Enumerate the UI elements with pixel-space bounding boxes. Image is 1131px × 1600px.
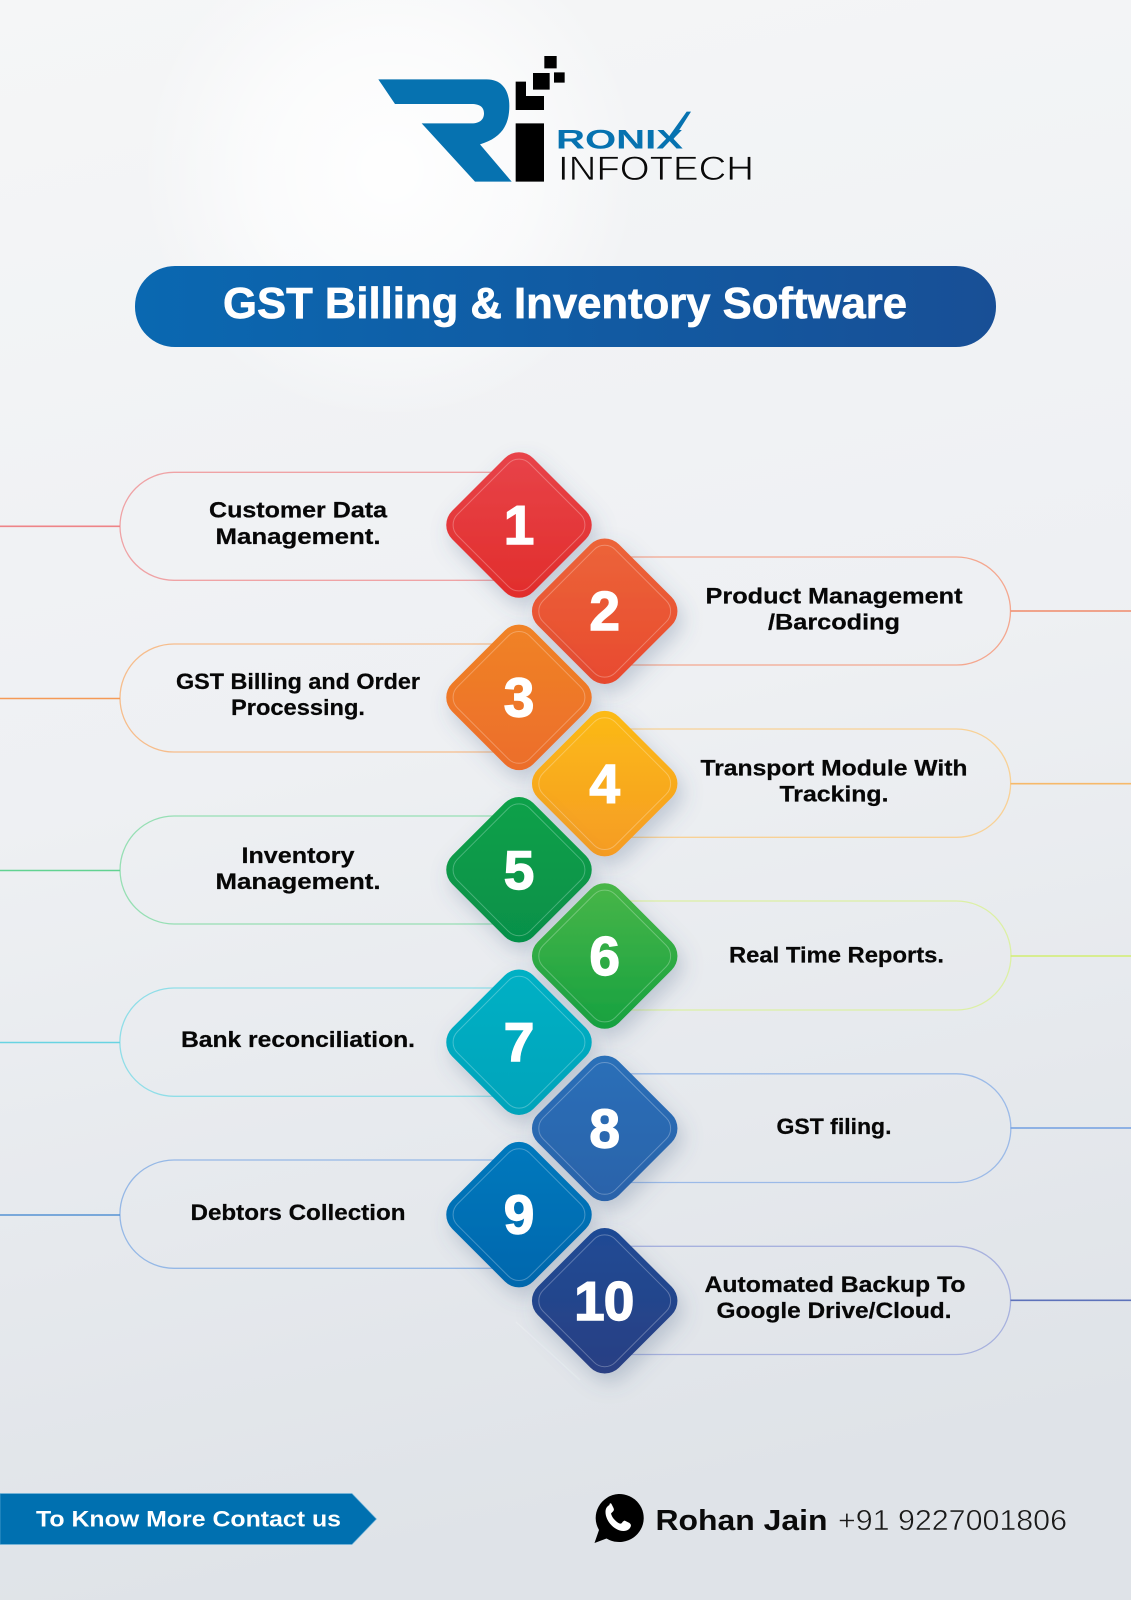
number diamond 7: 7 [504, 1011, 534, 1073]
number diamond 6: 6 [589, 925, 620, 987]
logo: Ronix Infotech [378, 56, 754, 188]
panel: item 5 outline [0, 816, 510, 924]
number diamond 9: 9 [504, 1184, 534, 1246]
contact ribbon [0, 1494, 376, 1544]
text: item 5: Management. [216, 869, 380, 894]
panel: item 3 outline [0, 644, 510, 752]
text: item 4 [700, 756, 968, 807]
number diamond 10: 10 [574, 1270, 633, 1332]
text: item 10: Automated Backup To [704, 1272, 966, 1297]
number diamond 1: 1 [504, 494, 534, 556]
number diamond 4: 4 [589, 753, 620, 815]
text: item 10 [704, 1272, 966, 1323]
panel: item 1 outline [0, 472, 510, 580]
text: item 1: Management. [216, 524, 380, 549]
text: item 4: Transport Module With [700, 756, 968, 781]
panel: item 7 outline [0, 988, 510, 1096]
text: item 7: Bank reconciliation. [181, 1027, 415, 1052]
faint decorative diamond edge [516, 1322, 580, 1380]
text: item 1 [209, 498, 388, 549]
panel: item 6 outline [600, 901, 1131, 1010]
number diamond 9 [438, 1134, 600, 1296]
number diamond 5 [438, 789, 600, 951]
text: item 2: /Barcoding [768, 610, 900, 634]
contact name: Rohan Jain [656, 1505, 828, 1537]
number diamond 8 [524, 1047, 686, 1209]
number diamond 2 [524, 530, 686, 692]
text: item 3: GST Billing and Order [176, 669, 420, 694]
number diamond 4 [524, 703, 686, 865]
text: item 2 [706, 584, 963, 634]
number diamond 8: 8 [589, 1097, 620, 1159]
logo wordmark: INFOTECH: INFOTECH [558, 150, 754, 188]
number diamond 5: 5 [504, 839, 534, 901]
text: item 2: Product Management [706, 584, 963, 608]
number diamond 2: 2 [589, 580, 620, 642]
number diamond 6 [524, 875, 686, 1037]
text: item 8: GST filing. [776, 1114, 892, 1139]
panel: item 8 outline [600, 1074, 1131, 1182]
number diamond 3: 3 [504, 666, 534, 728]
text: item 9: Debtors Collection [190, 1200, 406, 1225]
text: item 5 [216, 843, 380, 894]
panel: item 10 outline [600, 1246, 1131, 1354]
panel: item 9 outline [0, 1160, 510, 1268]
panel: item 2 outline [600, 557, 1131, 665]
text: item 6: Real Time Reports. [729, 943, 944, 968]
logo mark [378, 56, 691, 182]
title banner: GST Billing & Inventory Software [223, 279, 907, 328]
text: item 10: Google Drive/Cloud. [716, 1298, 952, 1323]
number diamond 7 [438, 961, 600, 1123]
contact ribbon: To Know More Contact us [36, 1507, 341, 1532]
number diamond 10 [524, 1220, 686, 1382]
text: item 1: Customer Data [209, 498, 388, 522]
text: item 5: Inventory [242, 843, 355, 868]
title banner [135, 266, 996, 347]
number diamond 1 [438, 444, 600, 606]
text: item 4: Tracking. [780, 782, 888, 807]
logo wordmark: RONIX: RONIX [556, 124, 683, 154]
icon: whatsapp [594, 1494, 644, 1543]
panel: item 4 outline [600, 729, 1131, 837]
text: item 3 [176, 669, 420, 720]
contact phone: +91 9227001806 [838, 1505, 1067, 1537]
number diamond 3 [438, 616, 600, 778]
text: item 3: Processing. [231, 695, 365, 720]
